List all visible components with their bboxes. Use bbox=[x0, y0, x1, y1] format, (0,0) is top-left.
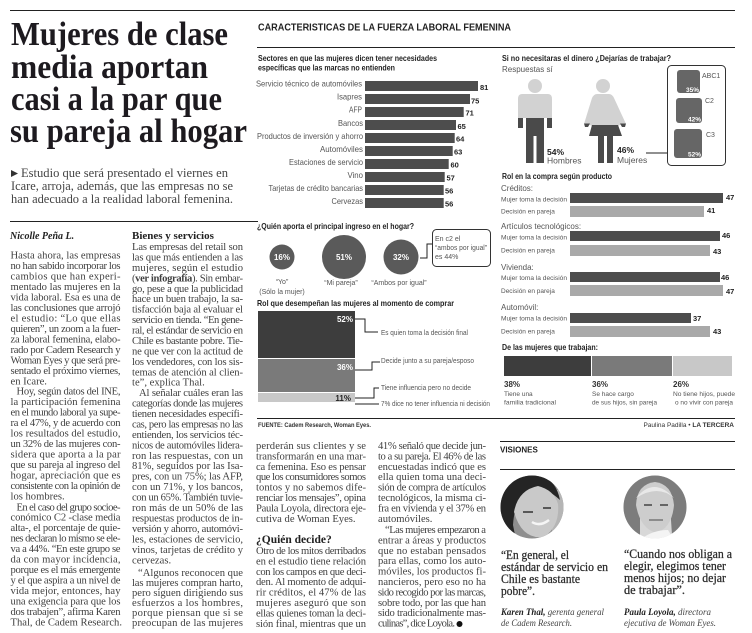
bar chart: role by product: Vivienda: bbox=[501, 263, 534, 272]
bar chart: sectors: Estaciones de servicio bbox=[289, 157, 363, 167]
callout: C2: En c2 el bbox=[435, 236, 461, 243]
article column 3: Paula Loyola, directora eje- bbox=[256, 503, 366, 514]
bar chart: role by product: Mujer toma la decisión bbox=[501, 234, 567, 242]
bar chart: role by product: Decisión en pareja bbox=[501, 328, 555, 336]
bar chart: role by product: 43 bbox=[713, 327, 721, 336]
article column 1: un 32% de las mujeres con- bbox=[10, 439, 121, 450]
article column 4: to a su pareja. El 46% de las bbox=[378, 451, 486, 462]
panel: visiones: ejecutiva de Woman Eyes. bbox=[624, 618, 716, 628]
callout: C2: “ambos por igual” bbox=[435, 245, 488, 252]
article column 1: Hoy, según datos del INE, bbox=[16, 387, 120, 398]
article column 1: cambios que han experi- bbox=[10, 272, 121, 282]
bar chart: sectors: Servicio técnico de automóviles bbox=[256, 78, 362, 88]
quote: Karen Thal: estándar de servicio en bbox=[501, 560, 609, 574]
callout: C2 bbox=[420, 230, 490, 266]
article column 1: no han sabido incorporar los bbox=[10, 261, 120, 272]
article column 3 bbox=[256, 441, 367, 630]
quote: Karen Thal: Chile es bastante bbox=[501, 572, 580, 586]
bar chart: sectors: Productos de inversión y ahorro bbox=[257, 131, 363, 141]
article column 2: Al señalar cuáles eran las bbox=[139, 388, 243, 399]
article column 1: sidera que aporta a la par bbox=[10, 450, 121, 461]
article column 2: Bienes y servicios bbox=[132, 230, 215, 242]
circles chart: main household income: 32% bbox=[393, 253, 409, 262]
article column 3: transformarán en una mar- bbox=[256, 451, 366, 462]
article column 4: para ellas, como los auto- bbox=[378, 556, 486, 567]
byline: Nicolle Peña L. bbox=[9, 231, 74, 242]
article column 2: (ver infografía). Sin embar- bbox=[132, 273, 243, 284]
article column 2: categorías donde las mujeres bbox=[132, 399, 243, 410]
photo: Karen Thal bbox=[500, 475, 566, 540]
article column 4: fra en vivienda y el 37% en bbox=[378, 503, 487, 514]
article column 4: sido tradicionalmente mas- bbox=[378, 608, 486, 619]
article column 4: ella quien toma una deci- bbox=[378, 472, 486, 483]
article column 1: consistente con la opinión de bbox=[10, 481, 121, 492]
article column 1: mentado las mujeres en la bbox=[10, 282, 121, 293]
article column 1: ra el 47%, y de acuerdo con bbox=[10, 418, 121, 429]
source: FUENTE: Cadem Research, Woman Eyes. bbox=[258, 422, 371, 429]
article column 1: nes declaran lo mismo se ele- bbox=[10, 534, 121, 544]
article column 2: pres, con un 75%; las AFP, bbox=[132, 472, 243, 483]
title bbox=[10, 16, 247, 150]
bar chart: sectors: 65 bbox=[458, 122, 466, 131]
bar chart: sectors: AFP bbox=[349, 104, 362, 114]
article column 1: Woman Eyes y que será pre- bbox=[10, 355, 121, 366]
bar chart: role by product: 46 bbox=[722, 231, 730, 240]
circles chart: main household income: “Yo” bbox=[276, 279, 289, 286]
article column 4: sión de compra de artículos bbox=[378, 483, 486, 494]
article column 4: 41% señaló que decide jun- bbox=[378, 441, 486, 452]
article column 3: que los consumidores somos bbox=[256, 472, 366, 483]
article column 1: los hombres. bbox=[10, 492, 65, 502]
bar chart: sectors: 57 bbox=[446, 174, 455, 182]
article column 2: temas de atención al clien- bbox=[132, 367, 243, 378]
stacked bar: role when buying: 36% bbox=[337, 363, 353, 372]
article column 1: sentado el próximo viernes, bbox=[10, 366, 120, 377]
bar chart: sectors: 56 bbox=[445, 200, 453, 208]
quote: Karen Thal: “En general, el bbox=[501, 548, 569, 562]
stacked bar: working women: Tiene una bbox=[504, 391, 533, 398]
bar chart: role by product bbox=[501, 172, 734, 337]
article column 3: cutiva de Woman Eyes. bbox=[256, 514, 356, 525]
circles chart: main household income: “Mi pareja” bbox=[324, 280, 358, 287]
article column 2: ron las respuestas, con un bbox=[132, 451, 244, 462]
bar chart: role by product: 46 bbox=[721, 273, 729, 282]
stacked bar: working women: 38% bbox=[504, 380, 520, 389]
bar chart: role by product: Decisión en pareja bbox=[501, 208, 555, 216]
stacked bar: role when buying: 52% bbox=[337, 315, 353, 324]
quote: Paula Loyola bbox=[624, 547, 732, 597]
bar chart: sectors: Vino bbox=[348, 170, 363, 180]
chart heading: Rol que desempeñan las mujeres al momento de comprar bbox=[257, 298, 455, 308]
chart heading: Sectores en que las mujeres dicen tener necesidades bbox=[258, 54, 437, 63]
article column 2: pero siguen dirigiendo sus bbox=[132, 588, 243, 599]
bar chart: role by product: Decisión en pareja bbox=[501, 288, 555, 295]
article column 2: mujeres, según el estudio bbox=[132, 263, 243, 274]
article column 2: Las empresas del retail son bbox=[132, 242, 244, 253]
article column 2: “Algunos reconocen que bbox=[138, 568, 243, 579]
panel: would you stop working: 46% bbox=[617, 145, 634, 155]
article column 3: en el estudio tiene relación bbox=[256, 556, 367, 567]
stacked bar: working women bbox=[502, 342, 735, 406]
article column 1: za laboral femenina, elabo- bbox=[10, 334, 121, 345]
article column 3: ¿Quién decide? bbox=[256, 534, 332, 546]
inset: socioeconomic groups: 35% bbox=[686, 87, 699, 94]
article column 1: dos trabajen”, afirma Karen bbox=[10, 607, 121, 618]
article column 3: ca femenina. Eso es pensar bbox=[256, 462, 366, 473]
circles chart: main household income: 16% bbox=[274, 253, 290, 262]
bar chart: role by product: Mujer toma la decisión bbox=[501, 275, 567, 282]
bar chart: sectors: Bancos bbox=[338, 118, 363, 128]
article column 1: los resultados del estudio, bbox=[10, 429, 120, 440]
article column 1: rado por Cadem Research y bbox=[10, 345, 121, 356]
section heading: CARACTERISTICAS DE LA FUERZA LABORAL FEMENINA bbox=[258, 22, 511, 34]
article column 2: tisfacción baja al evaluar el bbox=[132, 305, 243, 316]
article column 2: go, pese a que la publicidad bbox=[132, 284, 244, 295]
article column 1: En el caso del grupo socioe- bbox=[16, 502, 121, 514]
article column 1: conómico C2 -clase media bbox=[10, 512, 121, 524]
article column 3: ellas quienes toman la deci- bbox=[256, 608, 366, 619]
article column 1: una exigencia para que los bbox=[10, 596, 120, 607]
article column 4: sido recogido por las marcas, bbox=[378, 587, 486, 598]
article column 2: vinos, tarjetas de crédito y bbox=[132, 545, 244, 556]
bar chart: sectors: Automóviles bbox=[320, 144, 363, 154]
attribution: Karen Thal: Karen Thal, gerenta general bbox=[500, 607, 604, 617]
article column 2: las mujeres compran harto, bbox=[132, 578, 243, 589]
article column 4: culinas”, dice Loyola. bbox=[378, 619, 455, 630]
quote: Paula Loyola: elegir, elegimos tener bbox=[624, 559, 727, 573]
inset: socioeconomic groups bbox=[668, 66, 726, 166]
bar chart: role by product: Automóvil: bbox=[501, 303, 538, 312]
article column 3: con los campos en que deci- bbox=[256, 567, 366, 578]
inset: socioeconomic groups: C2 bbox=[705, 98, 714, 105]
chart heading: Rol en la compra según producto bbox=[502, 172, 612, 181]
panel: would you stop working: 54% bbox=[547, 147, 564, 157]
stacked bar: role when buying: Decide junto a su pareja/esposo bbox=[381, 358, 474, 365]
circles chart: main household income: (Sólo la mujer) bbox=[259, 289, 305, 296]
article column 3: renciar los mensajes”, opina bbox=[256, 493, 366, 504]
article column 2: Chile es bastante pobre. Tie- bbox=[132, 336, 243, 347]
article column 2: las que más entienden a las bbox=[132, 252, 243, 263]
article column 2: ne que ver con la actitud de bbox=[132, 346, 243, 357]
circles chart: main household income bbox=[257, 221, 427, 296]
inset: socioeconomic groups: C3 bbox=[706, 132, 715, 139]
stacked bar: working women: Se hace cargo bbox=[592, 391, 634, 398]
icon: man bbox=[518, 79, 552, 163]
stacked bar: working women: 36% bbox=[592, 380, 608, 389]
panel: would you stop working: Mujeres bbox=[617, 155, 647, 165]
stacked bar: working women: familia tradicional bbox=[504, 400, 557, 406]
article column 2: te”, explica Thal. bbox=[132, 378, 205, 389]
circles chart: main household income: 51% bbox=[336, 253, 352, 262]
chart heading: De las mujeres que trabajan: bbox=[502, 342, 598, 352]
title: media aportan bbox=[11, 49, 208, 86]
article column 2: nicos de automóviles lidera- bbox=[132, 440, 243, 451]
credit: Paulina Padilla • LA TERCERA bbox=[643, 422, 734, 429]
chart heading: específicas que las marcas no entienden bbox=[258, 64, 395, 72]
article column 4: encuestadas indicó que es bbox=[378, 462, 486, 473]
article column 4: móviles, los productos fi- bbox=[378, 567, 486, 578]
article column 2: porque piensan que si se bbox=[132, 608, 243, 619]
bar chart: role by product: 47 bbox=[726, 193, 734, 202]
article column 1: alta-, el porcentaje de quie- bbox=[10, 523, 121, 534]
article column 2: servicio en tienda. “En gene- bbox=[132, 315, 243, 326]
quote: Karen Thal: pobre”. bbox=[501, 584, 535, 598]
article column 2: 81%, seguidos por las Isa- bbox=[132, 461, 243, 472]
article column 4: sobre todo, por las que han bbox=[378, 598, 487, 609]
article column 3: den. Al momento de adqui- bbox=[256, 577, 366, 588]
stacked bar: role when buying: 7% dice no tener influencia ni decisión bbox=[381, 401, 490, 408]
panel: visiones bbox=[500, 441, 735, 628]
bar chart: role by product: 43 bbox=[713, 247, 721, 256]
article column 1: vida mejor, entonces, hay bbox=[10, 586, 121, 597]
article column 1: porque es el más emergente bbox=[10, 565, 121, 576]
article column 4: tecnológicos, la misma ci- bbox=[378, 493, 486, 504]
article column 3: tontos y no sabemos dife- bbox=[256, 483, 366, 494]
article column 4: que no estaban pensados bbox=[378, 546, 486, 557]
article column 3: mujeres aseguró que son bbox=[256, 598, 367, 609]
bar chart: sectors: 60 bbox=[450, 160, 459, 170]
article column 2: los vendedores, con los sis- bbox=[132, 357, 243, 368]
article column 3: sión final, mientras que un bbox=[256, 619, 367, 630]
deck text bbox=[11, 166, 233, 206]
stacked bar: working women: 26% bbox=[673, 380, 689, 389]
title: Mujeres de clase bbox=[11, 16, 228, 53]
chart heading: ¿Quién aporta el principal ingreso en el hogar? bbox=[257, 221, 414, 231]
icon: woman bbox=[584, 79, 626, 163]
article column 1: da con mayor incidencia, bbox=[10, 554, 120, 565]
deck text: han adecuado a la realidad laboral femenina. bbox=[11, 192, 233, 206]
article column 1: y el que aspira a un nivel de bbox=[10, 575, 121, 586]
inset: socioeconomic groups: ABC1 bbox=[702, 73, 720, 80]
bar chart: sectors: 56 bbox=[445, 186, 453, 196]
bar chart: sectors: 64 bbox=[456, 134, 465, 144]
stacked bar: working women: de sus hijos, sin pareja bbox=[592, 400, 657, 406]
article column 2: cas, pero las empresas no las bbox=[132, 420, 243, 430]
deck text: Estudio que será presentado el viernes en bbox=[21, 166, 229, 180]
bar chart: role by product: Mujer toma la decisión bbox=[501, 196, 567, 204]
bar chart: sectors: Tarjetas de crédito bancarias bbox=[268, 183, 363, 193]
panel: would you stop working: Respuestas sí bbox=[502, 65, 553, 74]
article column 2: ral, el estándar de servicio en bbox=[132, 326, 244, 336]
article column 4: nancieros, pero eso no ha bbox=[378, 577, 486, 588]
bar chart: role by product: Decisión en pareja bbox=[501, 248, 555, 254]
article column 3: rir créditos, el 47% de las bbox=[256, 588, 366, 599]
article column 3: Otro de los mitos derribados bbox=[256, 546, 366, 557]
quote: Paula Loyola: “Cuando nos obligan a bbox=[624, 547, 732, 561]
bar chart: role by product: 37 bbox=[693, 314, 701, 323]
article column 1: hogar, apreciación que es bbox=[10, 471, 120, 482]
article column 1: en Icare. bbox=[10, 376, 47, 387]
article column 4: automóviles. bbox=[378, 514, 432, 525]
panel: would you stop working bbox=[502, 53, 726, 166]
article column 2: tienen necesidades específi- bbox=[132, 409, 243, 420]
article column 2: versión y ahorro, automóvi- bbox=[132, 524, 243, 535]
article column 2: cervezas. bbox=[132, 556, 171, 566]
article column 1: que su pareja al ingreso del bbox=[10, 460, 121, 471]
article column 3: perderán sus clientes y se bbox=[256, 441, 366, 452]
article column 2: respuestas productos de in- bbox=[132, 513, 243, 524]
title: casi a la par que bbox=[11, 81, 222, 118]
article column 1: Thal, de Cadem Research. bbox=[10, 617, 122, 628]
title: su pareja al hogar bbox=[10, 113, 247, 150]
article column 1: va a 44%. “En este grupo se bbox=[10, 544, 121, 555]
panel: visiones: de Cadem Research. bbox=[501, 618, 572, 628]
article column 1: Hasta ahora, las empresas bbox=[10, 250, 120, 262]
bar chart: sectors: Isapres bbox=[337, 92, 362, 102]
stacked bar: working women: o no vivir con pareja bbox=[675, 400, 733, 406]
bar chart: role by product: 47 bbox=[726, 287, 734, 296]
bar chart: role by product: Créditos: bbox=[501, 184, 533, 193]
article column 1: la participación femenina bbox=[10, 397, 121, 408]
article column 4: “Las mujeres empezaron a bbox=[385, 525, 486, 536]
article column 2: hace un buen trabajo, la sa- bbox=[132, 294, 243, 305]
article column 2: les, estaciones de servicio, bbox=[132, 534, 243, 545]
article column 2: con un 71%, y los bancos, bbox=[132, 482, 243, 493]
bar chart: sectors: 75 bbox=[471, 96, 479, 106]
article column 1 bbox=[10, 250, 122, 628]
article column 2 bbox=[132, 230, 244, 629]
bar chart: sectors: 63 bbox=[454, 148, 462, 156]
inset: socioeconomic groups: 42% bbox=[688, 116, 701, 124]
article column 2: con un 65%. También tuvie- bbox=[132, 493, 243, 504]
circles chart: main household income: “Ambos por igual” bbox=[371, 280, 427, 287]
article column 1: las conclusiones que arrojó bbox=[10, 303, 120, 314]
bar chart: role by product: 41 bbox=[707, 206, 715, 215]
article column 4: entrar a áreas y productos bbox=[378, 535, 486, 546]
bar chart: role by product: Artículos tecnológicos: bbox=[501, 222, 581, 231]
photo: Paula Loyola bbox=[623, 475, 688, 540]
panel heading: Si no necesitaras el dinero ¿Dejarías de trabajar? bbox=[502, 53, 671, 63]
stacked bar: role when buying: Es quien toma la decisión final bbox=[381, 330, 468, 337]
stacked bar: working women: No tiene hijos, puede bbox=[673, 391, 735, 398]
quote: Karen Thal bbox=[501, 548, 609, 598]
stacked bar: role when buying: 11% bbox=[335, 394, 351, 403]
panel heading: VISIONES bbox=[500, 446, 538, 454]
article column 1: el estudio: “Lo que ellas bbox=[10, 313, 120, 324]
article column 2: preocupan de las mujeres bbox=[132, 618, 243, 629]
article column 1: vida laboral. Esa es una de bbox=[10, 292, 121, 303]
article column 2: ron más de un 50% de las bbox=[132, 503, 243, 514]
panel: would you stop working: Hombres bbox=[547, 156, 581, 166]
article column 4 bbox=[378, 441, 487, 630]
callout: C2: es 44% bbox=[435, 254, 458, 261]
inset: socioeconomic groups: 52% bbox=[688, 152, 701, 158]
article column 1: quieren”, un zoom a la fuer- bbox=[10, 324, 121, 335]
quote: Paula Loyola: menos hijos; no dejar bbox=[624, 571, 727, 585]
bar chart: sectors bbox=[256, 54, 488, 208]
article column 2: entienden, los servicios téc- bbox=[132, 430, 243, 441]
article column 2: esfuerzos a los hombres, bbox=[132, 598, 243, 609]
quote: Paula Loyola: de trabajar”. bbox=[624, 583, 685, 597]
bar chart: sectors: 71 bbox=[466, 108, 474, 118]
bar chart: sectors: Cervezas bbox=[332, 196, 363, 206]
stacked bar: role when buying: Tiene influencia pero no decide bbox=[381, 385, 471, 392]
attribution: Paula Loyola: Paula Loyola, directora bbox=[624, 607, 711, 617]
bar chart: role by product: Mujer toma la decisión bbox=[501, 316, 567, 322]
bar chart: sectors: 81 bbox=[480, 83, 488, 92]
stacked bar: role when buying bbox=[257, 298, 490, 408]
article column 1: en el mundo laboral ya supe- bbox=[10, 408, 121, 419]
deck text: Icare, arroja, además, que las empresas no se bbox=[11, 179, 233, 193]
